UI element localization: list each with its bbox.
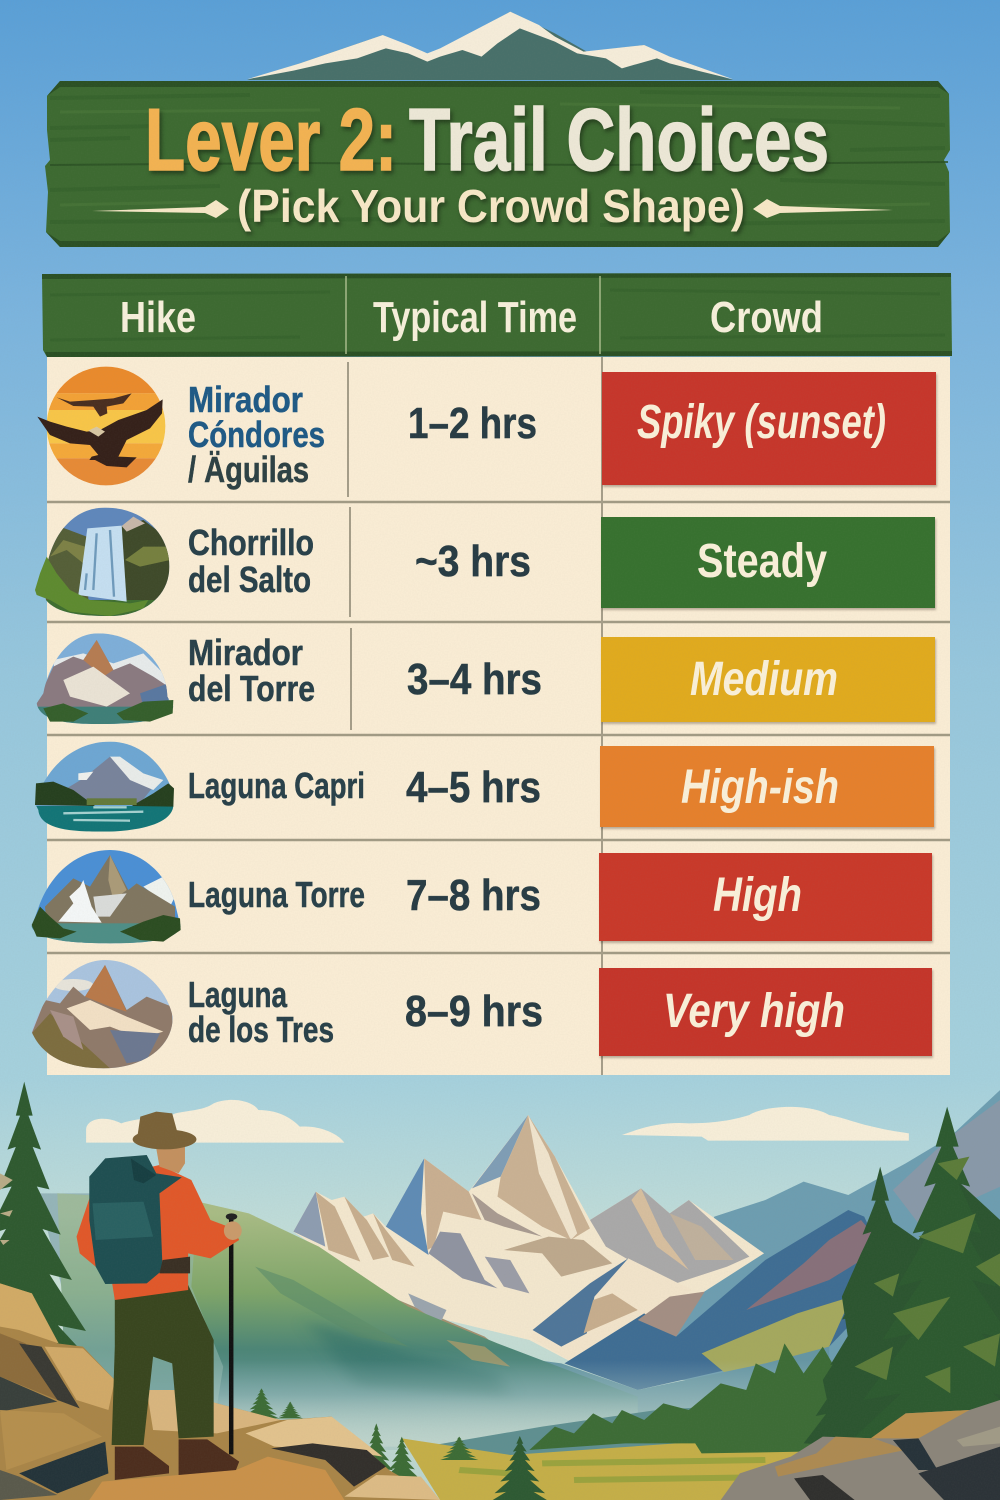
- right ornament: [753, 199, 893, 218]
- table: [30, 273, 952, 1075]
- crowd bar: high: High: [713, 869, 802, 922]
- head: [156, 1143, 185, 1173]
- hike name: Chorrillo: [188, 522, 314, 563]
- typical time: 7–8 hrs: [406, 871, 541, 920]
- crowd bar: spiky: [602, 372, 936, 485]
- tree: foreground centre: [491, 1436, 549, 1500]
- typical time: 4–5 hrs: [406, 763, 541, 812]
- row: Chorrillo del Salto: [35, 507, 935, 620]
- snowy massif: [293, 1115, 764, 1363]
- legs: [112, 1285, 214, 1445]
- hat: [133, 1112, 196, 1149]
- typical time: 3–4 hrs: [407, 655, 542, 704]
- mountain landscape scene: [0, 1082, 1000, 1500]
- title text: Lever 2:: [145, 90, 397, 189]
- green hillside: [57, 1193, 893, 1450]
- row: Mirador del Torre: [33, 632, 935, 727]
- forest: [244, 1343, 842, 1483]
- boots: [115, 1439, 239, 1480]
- crowd bar: very high: Very high: [663, 985, 845, 1038]
- hike name: Mirador: [188, 379, 303, 420]
- row: Laguna de los Tres: [30, 958, 932, 1070]
- hiker: [77, 1112, 242, 1480]
- table header: [42, 273, 952, 357]
- blue ridges: [510, 1210, 893, 1413]
- column lines: [348, 357, 602, 1075]
- crowd bar: high: [599, 853, 932, 941]
- title mountain: [247, 12, 733, 80]
- header: typical time: Typical Time: [373, 293, 577, 342]
- icon: mountain view: [33, 632, 177, 727]
- typical time: 1–2 hrs: [408, 399, 537, 448]
- clouds: [86, 1100, 909, 1143]
- typical time: ~3 hrs: [415, 537, 531, 586]
- crowd bar: high-ish: [600, 746, 934, 827]
- title text: Trail Choices: [409, 90, 829, 189]
- row: Chorrillo del Salto: del Salto: [188, 559, 311, 600]
- hike name: Laguna Capri: [188, 765, 365, 806]
- subtitle: (Pick Your Crowd Shape): [237, 180, 745, 232]
- trees: right: [804, 1107, 1000, 1450]
- sign board: [45, 81, 950, 247]
- row: Mirador del Torre: del Torre: [188, 668, 315, 709]
- row lines: [47, 502, 950, 953]
- icon: glacier lagoon: [30, 848, 183, 947]
- left rocks: [0, 1283, 440, 1500]
- header: hike: Hike: [120, 293, 196, 342]
- icon: alpine peaks: [30, 958, 177, 1070]
- crowd bar: very high: [599, 968, 932, 1056]
- row: Laguna Capri: [33, 740, 934, 833]
- jacket: [77, 1165, 239, 1300]
- typical time: 8–9 hrs: [405, 987, 543, 1036]
- hand: [224, 1221, 242, 1240]
- hike name: Laguna: [188, 974, 288, 1015]
- title text: [145, 90, 829, 189]
- row: Laguna de los Tres: de los Tres: [188, 1009, 334, 1050]
- hike name: Laguna Torre: [188, 874, 365, 915]
- icon: lake and peak: [33, 740, 177, 833]
- row: Mirador Condores: [37, 363, 936, 490]
- crowd bar: steady: [601, 517, 935, 608]
- crowd bar: medium: Medium: [690, 653, 838, 706]
- hike name: Mirador: [188, 632, 303, 673]
- crowd bar: spiky: Spiky (sunset): [637, 396, 886, 449]
- crowd bar: high-ish: High-ish: [681, 761, 839, 814]
- title sign: [45, 81, 950, 247]
- valley and meadow: [402, 1400, 829, 1500]
- distant mountains: [38, 1090, 1000, 1380]
- icon: condors at sunset: [37, 363, 170, 488]
- right rocks: [721, 1400, 1000, 1500]
- row: Mirador Condores: / Äguilas: [188, 449, 309, 490]
- tree: left: [0, 1082, 94, 1365]
- crowd bar: steady: Steady: [697, 535, 827, 588]
- row: Laguna Torre: [30, 848, 932, 947]
- icon: waterfall: [35, 507, 177, 620]
- table body: [47, 357, 950, 1075]
- hiking pole: [226, 1213, 237, 1454]
- left ornament: [92, 200, 229, 218]
- backpack: [89, 1155, 190, 1284]
- header: crowd: Crowd: [710, 293, 823, 342]
- row: Mirador Condores: Cóndores: [188, 414, 325, 455]
- crowd bar: medium: [601, 637, 935, 722]
